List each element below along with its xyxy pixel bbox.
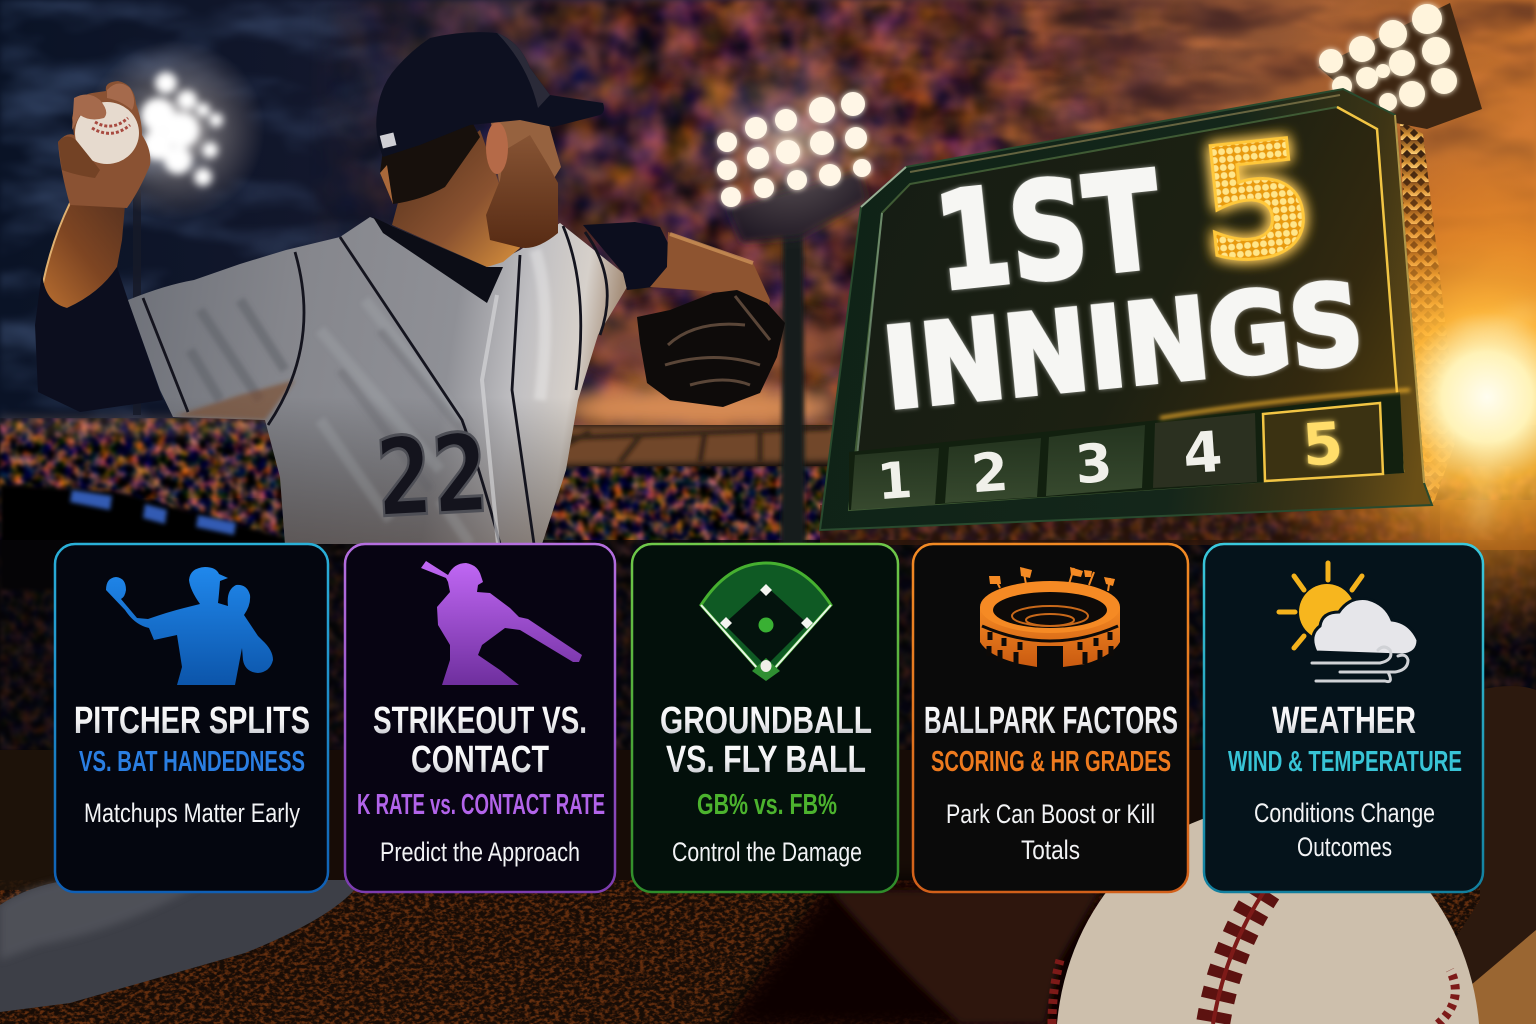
foreground baseball in mitt <box>830 686 1536 1024</box>
card subtitle: SCORING & HR GRADES <box>931 746 1171 778</box>
sleeve on glove arm <box>583 222 668 290</box>
jersey folds <box>175 250 545 544</box>
undershirt <box>373 217 503 303</box>
sun flare <box>1237 147 1536 647</box>
card text line 2: Totals <box>1021 835 1080 865</box>
card text line 2: Outcomes <box>1297 832 1392 862</box>
scoreboard <box>820 89 1432 530</box>
throwing forearm <box>43 203 125 308</box>
heading: lit 5: 5 <box>1190 105 1322 300</box>
card title line 2: CONTACT <box>411 739 549 781</box>
icon: stadium <box>980 567 1120 667</box>
card title: BALLPARK FACTORS <box>924 700 1178 742</box>
lower stand shadows <box>0 484 285 590</box>
icon: baseball diamond <box>701 563 831 681</box>
scoreboard frame <box>820 89 1432 530</box>
ball in hand <box>58 83 139 178</box>
inning tile 2: 2 <box>969 442 1010 505</box>
pitcher <box>0 32 785 1012</box>
light tower: left <box>85 40 265 415</box>
card title line 2: VS. FLY BALL <box>666 739 866 781</box>
inning tile 1 <box>851 448 939 511</box>
ear <box>486 122 508 174</box>
pitcher leg <box>0 880 362 1012</box>
jersey number 22: 22 <box>373 411 491 542</box>
inning tile 2 <box>945 438 1041 505</box>
light tower: right <box>1318 3 1482 505</box>
inning tile 3 <box>1046 425 1145 496</box>
panel: ballpark factors <box>913 544 1188 892</box>
icon: sun, cloud and wind <box>1279 563 1418 682</box>
neck <box>392 130 520 267</box>
scoreboard panel <box>849 107 1403 510</box>
card title: STRIKEOUT VS. <box>373 700 587 742</box>
panel: groundball vs fly ball <box>632 544 898 892</box>
horizon band <box>0 425 1536 1024</box>
card title: GROUNDBALL <box>660 700 872 742</box>
inning tile 5, highlighted <box>1263 403 1383 481</box>
card text: Park Can Boost or Kill <box>946 799 1155 829</box>
glove <box>637 290 785 407</box>
beard <box>486 135 558 248</box>
icon: batter silhouette <box>421 561 582 685</box>
card text: Matchups Matter Early <box>84 798 300 828</box>
card text: Predict the Approach <box>380 837 580 867</box>
face <box>490 115 561 210</box>
inning tile 4: 4 <box>1181 420 1224 487</box>
jersey piping <box>143 226 607 544</box>
undersleeve <box>35 267 163 412</box>
infield dirt <box>0 750 1536 1024</box>
panel: pitcher splits <box>55 544 328 892</box>
cap <box>376 32 604 157</box>
card subtitle: GB% vs. FB% <box>697 789 837 821</box>
card subtitle: K RATE vs. CONTACT RATE <box>357 789 605 821</box>
inning tile 3: 3 <box>1073 433 1114 496</box>
inning tile 1: 1 <box>875 451 914 511</box>
panel: strikeout vs contact <box>345 544 615 892</box>
card subtitle: VS. BAT HANDEDNESS <box>79 746 305 778</box>
inning tile 4 <box>1153 413 1257 488</box>
light tower: centre <box>685 40 895 545</box>
heading: INNINGS: INNINGS <box>878 260 1368 435</box>
icon: pitcher silhouette <box>106 567 273 685</box>
card text: Conditions Change <box>1254 798 1435 828</box>
hair <box>380 118 480 204</box>
throwing hand <box>58 81 150 208</box>
heading: 1ST: 1ST <box>928 144 1167 321</box>
panel: weather <box>1204 544 1483 892</box>
card title: WEATHER <box>1272 700 1416 742</box>
card text: Control the Damage <box>672 837 862 867</box>
card title: PITCHER SPLITS <box>74 700 310 742</box>
jersey <box>128 217 627 544</box>
glove arm <box>650 232 770 310</box>
inning tile 5, highlighted: 5 <box>1300 409 1345 479</box>
